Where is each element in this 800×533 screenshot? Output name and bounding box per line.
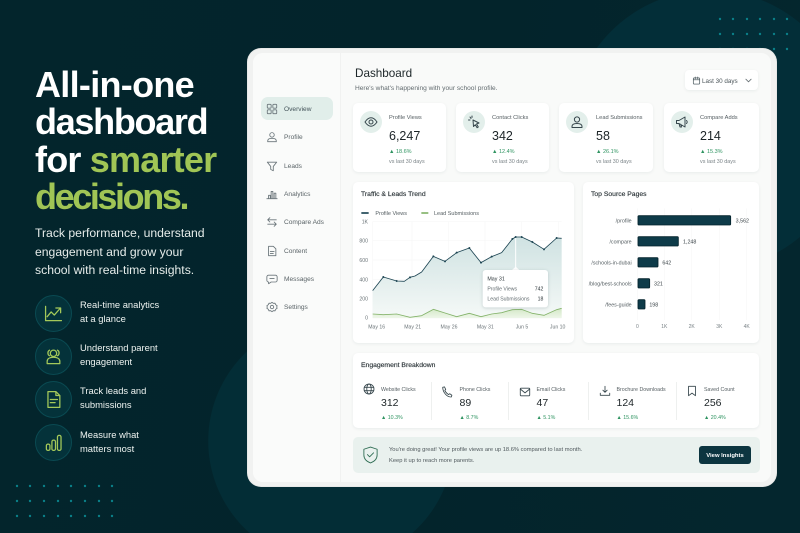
metric: phone clicks xyxy=(442,386,490,420)
line chart: May 31 xyxy=(487,277,505,283)
banner text: You're doing great! Your profile views are up 18.6% compared to last month. xyxy=(389,447,582,453)
line chart: 600 xyxy=(359,258,368,264)
panel: sidebar navigation xyxy=(253,53,341,482)
KPI card: profile views: 6,247 xyxy=(389,128,420,142)
heading: engagement: Engagement Breakdown xyxy=(361,362,435,368)
KPI card: compare adds: 214 xyxy=(700,128,721,142)
icon: calendar xyxy=(692,76,700,84)
metric: email clicks: Email Clicks xyxy=(536,386,565,392)
icon: megaphone xyxy=(671,111,693,133)
bar chart: /compare xyxy=(609,239,632,245)
KPI card: lead submissions: vs last 30 days xyxy=(596,158,632,164)
icon: phone xyxy=(442,386,452,398)
feature: track leads xyxy=(35,381,146,418)
line chart: Lead Submissions xyxy=(434,211,479,217)
bar chart: 0 xyxy=(636,324,639,330)
date range label: Last 30 days xyxy=(702,78,738,84)
metric: phone clicks: 89 xyxy=(460,396,471,408)
line chart: 18 xyxy=(538,297,543,303)
nav: settings xyxy=(266,302,308,312)
metric: brochure downloads xyxy=(600,386,666,420)
metric: brochure downloads: 124 xyxy=(616,396,634,408)
metric: phone clicks: Phone Clicks xyxy=(460,386,490,392)
feature: parent engagement: Understand parent xyxy=(80,342,158,353)
bar chart: /schools-in-dubai xyxy=(591,260,632,266)
nav: compare ads xyxy=(267,217,324,227)
KPI card: profile views: vs last 30 days xyxy=(389,158,425,164)
bar chart: 4K xyxy=(744,324,750,330)
KPI card: lead submissions xyxy=(559,103,653,172)
KPI card: profile views: Profile Views xyxy=(389,114,422,120)
line chart: May 16 xyxy=(368,324,385,330)
feature: measure xyxy=(35,424,139,461)
bar chart: 642 xyxy=(662,260,671,266)
date range dropdown xyxy=(685,70,758,90)
KPI card: contact clicks xyxy=(456,103,549,172)
intro text: school with real-time insights. xyxy=(35,263,194,277)
line chart: Jun 10 xyxy=(550,324,566,330)
feature: measure: Measure what xyxy=(80,429,139,440)
line chart: 800 xyxy=(359,239,368,245)
metric: saved count: Saved Count xyxy=(704,386,735,392)
feature: parent engagement xyxy=(35,338,158,375)
feature: measure: matters most xyxy=(80,443,134,454)
nav: overview xyxy=(261,97,333,120)
button: view insights xyxy=(699,446,751,464)
nav: profile xyxy=(267,132,303,142)
title: All-in-one xyxy=(35,64,194,105)
heading: source pages: Top Source Pages xyxy=(591,190,647,198)
feature: real-time analytics: at a glance xyxy=(80,313,126,324)
icon: user xyxy=(566,111,588,133)
bar chart xyxy=(588,208,750,330)
KPI card: contact clicks: Contact Clicks xyxy=(492,114,528,120)
nav: content: Content xyxy=(284,248,307,254)
nav: profile: Profile xyxy=(284,134,303,140)
icon: download xyxy=(600,386,610,396)
nav: overview: Overview xyxy=(284,106,311,112)
feature: track leads: Track leads and xyxy=(80,385,146,396)
feature: real-time analytics xyxy=(35,295,159,332)
metric: email clicks: 47 xyxy=(536,396,548,408)
nav: settings: Settings xyxy=(284,304,308,310)
bar chart: 198 xyxy=(649,302,658,308)
line chart: May 21 xyxy=(404,324,421,330)
nav: analytics xyxy=(266,190,310,200)
line chart: Profile Views xyxy=(487,287,517,293)
nav: compare ads: Compare Ads xyxy=(284,218,324,226)
bar chart: 1,248 xyxy=(683,239,696,245)
bar chart: 3,562 xyxy=(736,218,749,224)
panel: engagement breakdown xyxy=(353,353,759,428)
feature: track leads: submissions xyxy=(80,399,132,410)
icon: bookmark xyxy=(688,386,696,396)
line chart: Profile Views xyxy=(375,211,407,217)
metric: email clicks: ▲ 5.1% xyxy=(536,414,555,420)
title: dashboard xyxy=(35,101,207,142)
button: view insights: View Insights xyxy=(706,453,744,459)
icon: eye xyxy=(360,111,382,133)
heading: traffic: Traffic & Leads Trend xyxy=(361,190,426,198)
metric: saved count: 256 xyxy=(704,396,722,408)
metric: website clicks: Website Clicks xyxy=(381,386,416,392)
metric: phone clicks: ▲ 8.7% xyxy=(460,414,478,420)
metric: website clicks: 312 xyxy=(381,396,399,408)
subheading: Here's what's happening with your school profile. xyxy=(355,84,498,92)
metric: website clicks xyxy=(364,384,416,420)
feature: real-time analytics: Real-time analytics xyxy=(80,299,159,310)
line chart: Jun 5 xyxy=(516,324,528,330)
line chart: 0 xyxy=(365,316,368,322)
KPI card: contact clicks: 342 xyxy=(492,128,513,142)
KPI card: lead submissions: 58 xyxy=(596,128,610,142)
bar chart: /blog/best-schools xyxy=(589,281,632,287)
heading: dashboard: Dashboard xyxy=(355,66,412,80)
intro text: Track performance, understand xyxy=(35,226,205,240)
KPI card: lead submissions: Lead Submissions xyxy=(596,114,642,120)
icon: envelope xyxy=(520,388,530,396)
callout: insight banner xyxy=(353,437,760,473)
line chart xyxy=(359,211,566,330)
nav: messages: Messages xyxy=(284,276,314,282)
KPI card: lead submissions: ▲ 26.1% xyxy=(596,148,619,154)
line chart: May 31 xyxy=(477,324,494,330)
bar chart: 321 xyxy=(654,281,663,287)
title: decisions. xyxy=(35,176,187,217)
title xyxy=(35,64,217,217)
KPI card: compare adds: Compare Adds xyxy=(700,114,738,120)
panel: top source pages xyxy=(583,182,759,343)
KPI card: profile views: ▲ 18.6% xyxy=(389,148,412,154)
line chart: 1K xyxy=(362,219,369,225)
icon: cursor click xyxy=(463,111,485,133)
metric: saved count: ▲ 20.4% xyxy=(704,414,726,420)
KPI card: compare adds: ▲ 15.3% xyxy=(700,148,723,154)
line chart: May 26 xyxy=(441,324,458,330)
intro text xyxy=(35,226,205,277)
KPI card: contact clicks: ▲ 12.4% xyxy=(492,148,515,154)
KPI card: profile views xyxy=(353,103,446,172)
nav: leads: Leads xyxy=(284,162,302,170)
metric: brochure downloads: Brochure Downloads xyxy=(616,386,666,392)
line chart: 400 xyxy=(359,277,368,283)
bar chart: /fees-guide xyxy=(605,302,632,308)
line chart: 200 xyxy=(359,297,368,303)
metric: website clicks: ▲ 10.3% xyxy=(381,414,403,420)
metric: saved count xyxy=(688,386,735,420)
bar chart: 2K xyxy=(689,324,695,330)
intro text: engagement and grow your xyxy=(35,244,183,258)
icon: globe xyxy=(364,384,374,394)
nav: analytics: Analytics xyxy=(284,190,310,198)
nav: content xyxy=(268,246,308,256)
metric: email clicks xyxy=(520,386,566,420)
title: for smarter xyxy=(35,139,216,180)
panel: traffic and leads trend xyxy=(353,182,574,343)
banner text: Keep it up to reach more parents. xyxy=(389,458,474,464)
panel: dashboard window xyxy=(248,49,776,486)
line chart: Lead Submissions xyxy=(487,297,530,303)
KPI card: compare adds xyxy=(664,103,759,172)
icon: shield check xyxy=(363,446,378,464)
nav: messages xyxy=(266,274,314,284)
nav: leads xyxy=(266,162,302,172)
KPI card: compare adds: vs last 30 days xyxy=(700,158,736,164)
banner text xyxy=(389,447,582,464)
icon: chevron xyxy=(745,78,752,82)
bar chart: /profile xyxy=(616,218,632,224)
metric: brochure downloads: ▲ 15.6% xyxy=(616,414,638,420)
feature: parent engagement: engagement xyxy=(80,356,132,367)
line chart: 742 xyxy=(535,287,543,293)
bar chart: 1K xyxy=(661,324,668,330)
bar chart: 3K xyxy=(716,324,723,330)
KPI card: contact clicks: vs last 30 days xyxy=(492,158,528,164)
